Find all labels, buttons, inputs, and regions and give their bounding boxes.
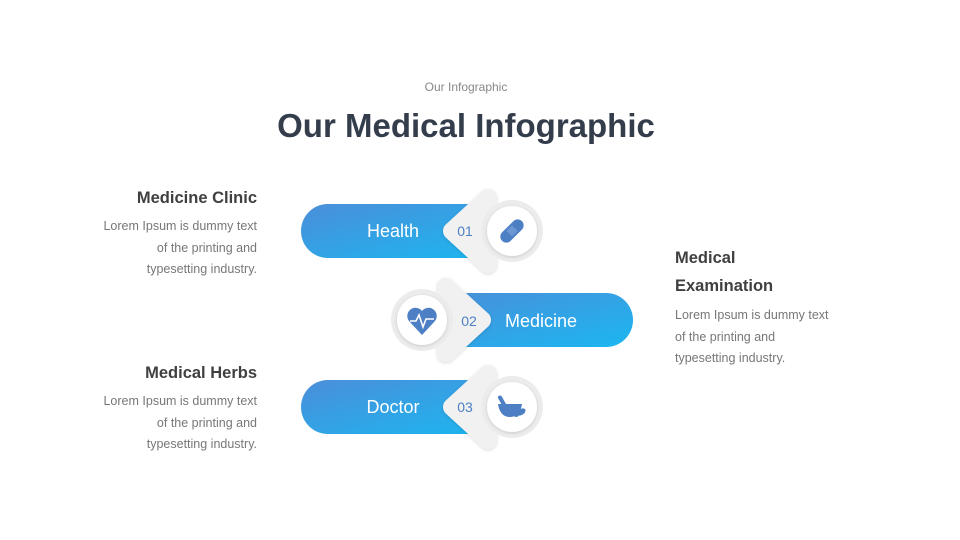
- text block: Medicine Clinic: Lorem Ipsum is dummy text: [103, 219, 258, 233]
- row 1: Health: 01: [457, 223, 473, 239]
- text block: Medical Herbs: [103, 364, 258, 451]
- icon: bandage: [498, 217, 526, 245]
- icon: mortar with herbs: [497, 395, 527, 418]
- text block: Medical Herbs: Medical Herbs: [145, 364, 257, 382]
- subtitle: Our Infographic: [425, 80, 507, 94]
- row 3: Doctor: 03: [457, 399, 473, 415]
- row 3: Doctor: Doctor: [366, 397, 420, 417]
- row 1: Health: [301, 198, 543, 264]
- row 2: Medicine: [391, 287, 633, 353]
- text block: Medicine Clinic: [103, 189, 258, 276]
- text block: Medicine Clinic: Medicine Clinic: [137, 189, 257, 207]
- row 2: Medicine: 02: [461, 313, 477, 329]
- text block: Medical Herbs: typesetting industry.: [147, 437, 257, 451]
- text block: Medical Examination: of the printing and: [675, 330, 775, 344]
- text block: Medicine Clinic: of the printing and: [157, 241, 257, 255]
- row 1: Health: Health: [367, 221, 419, 241]
- text block: Medical Examination: [675, 249, 829, 365]
- row 3: Doctor: [301, 374, 543, 440]
- text block: Medical Herbs: Lorem Ipsum is dummy text: [103, 394, 258, 408]
- text block: Medical Herbs: of the printing and: [157, 416, 257, 430]
- text block: Medicine Clinic: typesetting industry.: [147, 262, 257, 276]
- text block: Medical Examination: Lorem Ipsum is dummy text: [675, 308, 829, 322]
- text block: Medical Examination: typesetting industry.: [675, 351, 785, 365]
- text block: Medical Examination: Medical: [675, 249, 736, 267]
- text block: Medical Examination: Examination: [675, 277, 773, 295]
- icon: heart: [407, 308, 437, 335]
- row 2: Medicine: Medicine: [505, 311, 577, 331]
- title: Our Medical Infographic: [277, 107, 655, 144]
